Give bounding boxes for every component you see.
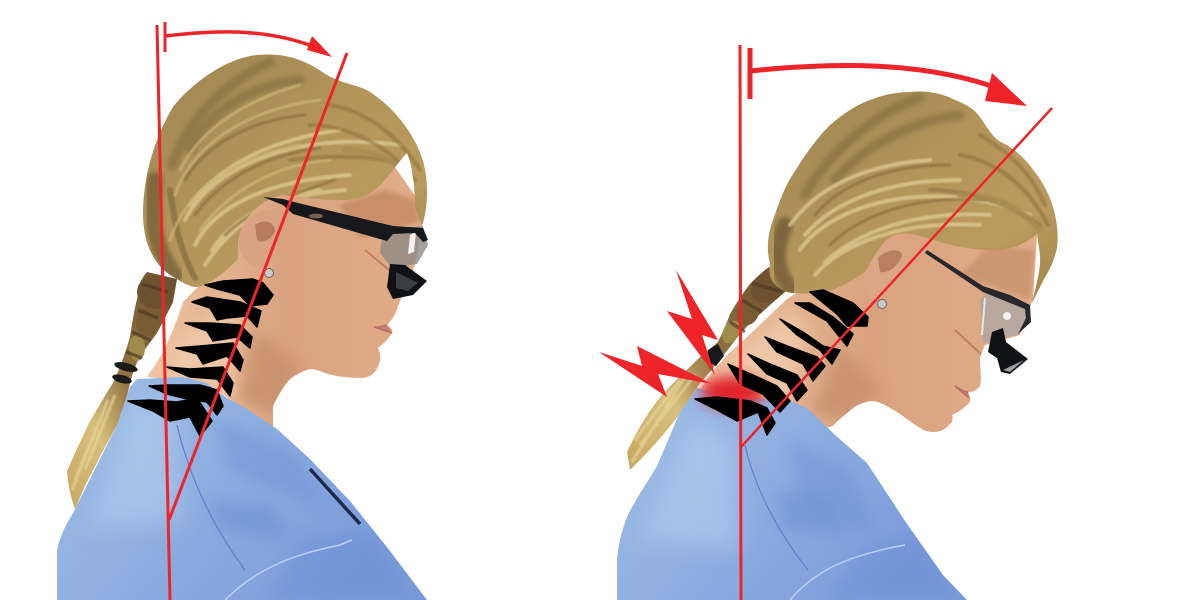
braid (67, 272, 177, 509)
ear (863, 238, 910, 300)
hair (143, 54, 427, 287)
figure: good posture (57, 22, 428, 600)
head angle line (741, 108, 1052, 447)
scrubs (617, 388, 967, 600)
lightning bolt: upper (667, 270, 718, 375)
vertical reference line (157, 25, 170, 600)
hair tie (708, 344, 724, 366)
pain glow (701, 376, 765, 408)
vertical reference line (740, 45, 741, 600)
earring (264, 268, 274, 278)
hair (768, 92, 1058, 303)
scrubs (57, 377, 427, 600)
neck and face (700, 230, 1037, 432)
neck and face (147, 160, 422, 430)
vertebrae (695, 290, 868, 435)
angle arrow (165, 22, 332, 57)
vertebrae (128, 279, 273, 436)
ear (239, 210, 283, 269)
lightning bolt: lower (599, 346, 712, 397)
angle arrow (750, 48, 1027, 106)
head angle line (169, 53, 347, 520)
hair tie (111, 360, 139, 385)
earring (878, 300, 886, 308)
figure: forward head posture (599, 45, 1058, 600)
braid (627, 263, 791, 470)
safety glasses (925, 250, 1031, 374)
safety glasses (263, 197, 428, 299)
